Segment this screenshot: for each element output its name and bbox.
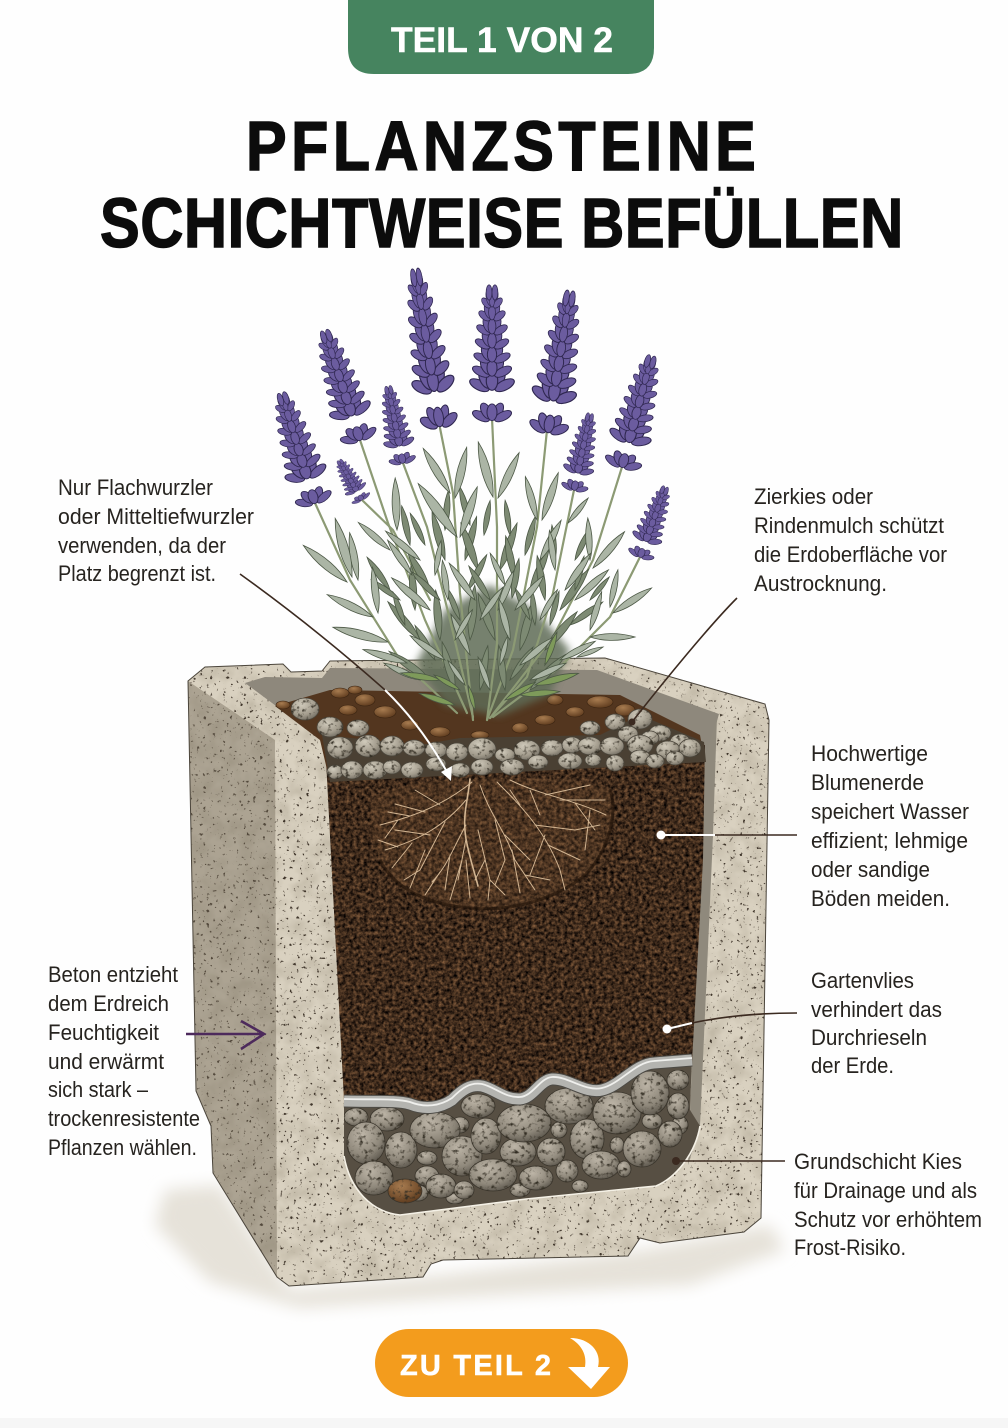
- front leaves: [301, 441, 653, 691]
- callout: concrete warning: dem Erdreich: [48, 991, 169, 1016]
- callout: concrete warning: Feuchtigkeit: [48, 1020, 159, 1045]
- callout: concrete warning: sich stark –: [48, 1077, 149, 1102]
- young green base leaves: [400, 631, 579, 710]
- callout: concrete warning: Beton entzieht: [48, 962, 178, 987]
- inner back wall: [245, 668, 719, 780]
- fleece layer: [344, 1058, 692, 1107]
- button: to part 2: [375, 1329, 628, 1397]
- callout: gravel base: für Drainage und als: [794, 1178, 977, 1203]
- illustration: lavender plant: [259, 265, 682, 720]
- leader line: gravel base: [672, 1157, 785, 1165]
- callout: mulch: Austrocknung.: [754, 571, 887, 596]
- title: PFLANZSTEINE: [246, 107, 756, 185]
- callout: mulch: die Erdoberfläche vor: [754, 542, 947, 567]
- badge: part 1 of 2: TEIL 1 VON 2: [391, 21, 613, 60]
- arrow: concrete warning: [186, 1021, 264, 1049]
- inner right wall: [688, 716, 717, 1165]
- title: SCHICHTWEISE BEFÜLLEN: [100, 183, 903, 262]
- mulch surface: [275, 690, 705, 782]
- callout: garden fleece: der Erde.: [811, 1053, 894, 1078]
- callout: plant choice: verwenden, da der: [58, 533, 226, 558]
- callout: plant choice: Platz begrenzt ist.: [58, 561, 216, 586]
- foliage shadow mass: [415, 585, 570, 716]
- badge: part 1 of 2: [348, 0, 654, 74]
- callout: gravel base: [794, 1149, 982, 1260]
- back leaves: [365, 486, 611, 693]
- leader line: potting soil: [656, 830, 797, 840]
- callout: concrete warning: [48, 962, 200, 1160]
- leader line: garden fleece: [662, 1013, 797, 1034]
- gravel compartment: [344, 1056, 700, 1215]
- callout: potting soil: Böden meiden.: [811, 886, 950, 911]
- callout: garden fleece: [811, 968, 942, 1078]
- callout: potting soil: oder sandige: [811, 857, 930, 882]
- bottom drainage gravel: [344, 1070, 689, 1204]
- bark mulch pieces: [276, 686, 635, 739]
- leader line: mulch: [628, 598, 737, 726]
- callout: potting soil: [811, 741, 969, 911]
- callout: plant choice: [58, 475, 254, 586]
- callout: potting soil: Blumenerde: [811, 770, 924, 795]
- title: [100, 107, 903, 262]
- icon: curved down arrow: [568, 1338, 610, 1389]
- callout: garden fleece: Durchrieseln: [811, 1025, 927, 1050]
- front wall highlight: [344, 1126, 700, 1215]
- block left side face: [188, 681, 277, 1277]
- callout: potting soil: effizient; lehmige: [811, 828, 968, 853]
- concrete block: [180, 650, 780, 1295]
- callout: gravel base: Frost-Risiko.: [794, 1235, 906, 1260]
- potting soil: [320, 740, 712, 1110]
- callout: plant choice: Nur Flachwurzler: [58, 475, 213, 500]
- decorative gravel layer: [291, 698, 701, 779]
- callout: potting soil: Hochwertige: [811, 741, 928, 766]
- callout: potting soil: speichert Wasser: [811, 799, 969, 824]
- root ball: [365, 775, 620, 915]
- callout: garden fleece: verhindert das: [811, 997, 942, 1022]
- callout: concrete warning: trockenresistente: [48, 1106, 200, 1131]
- ground shadow: [155, 1185, 785, 1308]
- callout: concrete warning: Pflanzen wählen.: [48, 1135, 197, 1160]
- roots: [378, 779, 606, 900]
- callout: concrete warning: und erwärmt: [48, 1049, 164, 1074]
- callout: garden fleece: Gartenvlies: [811, 968, 914, 993]
- callout: gravel base: Schutz vor erhöhtem: [794, 1207, 982, 1232]
- stems: [315, 418, 640, 720]
- callout: plant choice: oder Mitteltiefwurzler: [58, 504, 254, 529]
- arrow: plant choice to root ball: [240, 574, 452, 781]
- callout: mulch: [754, 484, 947, 596]
- flower spikes: [259, 265, 682, 565]
- illustration: cross-section of planting block: [155, 650, 785, 1308]
- button: to part 2: ZU TEIL 2: [400, 1350, 551, 1382]
- pebble bed shadow: [322, 715, 706, 782]
- callout: mulch: Rindenmulch schützt: [754, 513, 944, 538]
- callout: mulch: Zierkies oder: [754, 484, 873, 509]
- callout: gravel base: Grundschicht Kies: [794, 1149, 962, 1174]
